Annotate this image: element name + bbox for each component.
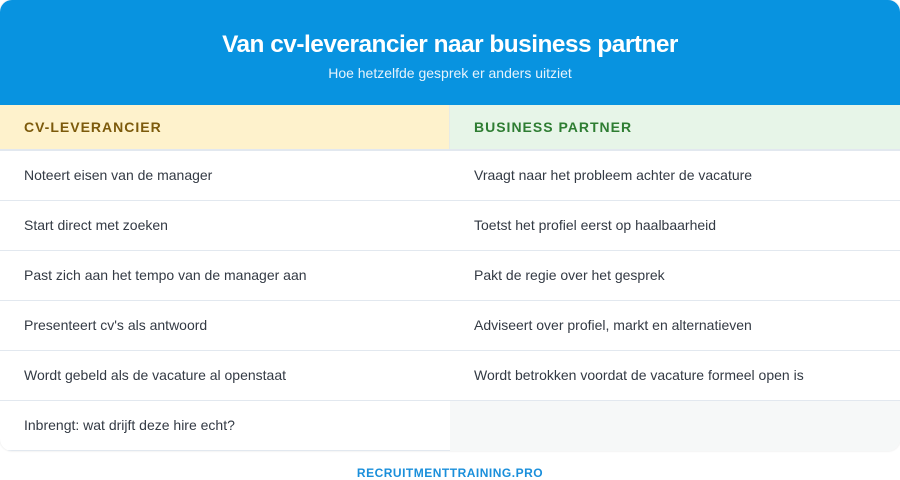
column headers: CV-LEVERANCIER: [24, 119, 162, 135]
header: Hoe hetzelfde gesprek er anders uitziet: [328, 65, 572, 81]
header: Van cv-leverancier naar business partner: [222, 31, 678, 58]
header: [0, 0, 900, 105]
row 1: [0, 151, 900, 201]
column headers: BUSINESS PARTNER: [474, 119, 632, 135]
row 5: [0, 351, 900, 401]
row 6: [8, 401, 900, 451]
row 4: Presenteert cv's als antwoord: [24, 317, 207, 333]
row 5: Wordt betrokken voordat de vacature formeel open is: [474, 367, 804, 383]
row 4: Adviseert over profiel, markt en alternatieven: [474, 317, 752, 333]
row 1: Vraagt naar het probleem achter de vacature: [474, 167, 752, 183]
row 2: Start direct met zoeken: [24, 217, 168, 233]
row 3: [0, 251, 900, 301]
row 5: Wordt gebeld als de vacature al openstaat: [24, 367, 286, 383]
row 2: [0, 201, 900, 251]
row 4: [0, 301, 900, 351]
row 3: Pakt de regie over het gesprek: [474, 267, 665, 283]
row 1: Noteert eisen van de manager: [24, 167, 212, 183]
column headers: [0, 105, 900, 151]
row 6: Inbrengt: wat drijft deze hire echt?: [24, 417, 235, 433]
footer: RECRUITMENTTRAINING.PRO: [357, 466, 543, 480]
row 3: Past zich aan het tempo van de manager aan: [24, 267, 307, 283]
row 2: Toetst het profiel eerst op haalbaarheid: [474, 217, 716, 233]
